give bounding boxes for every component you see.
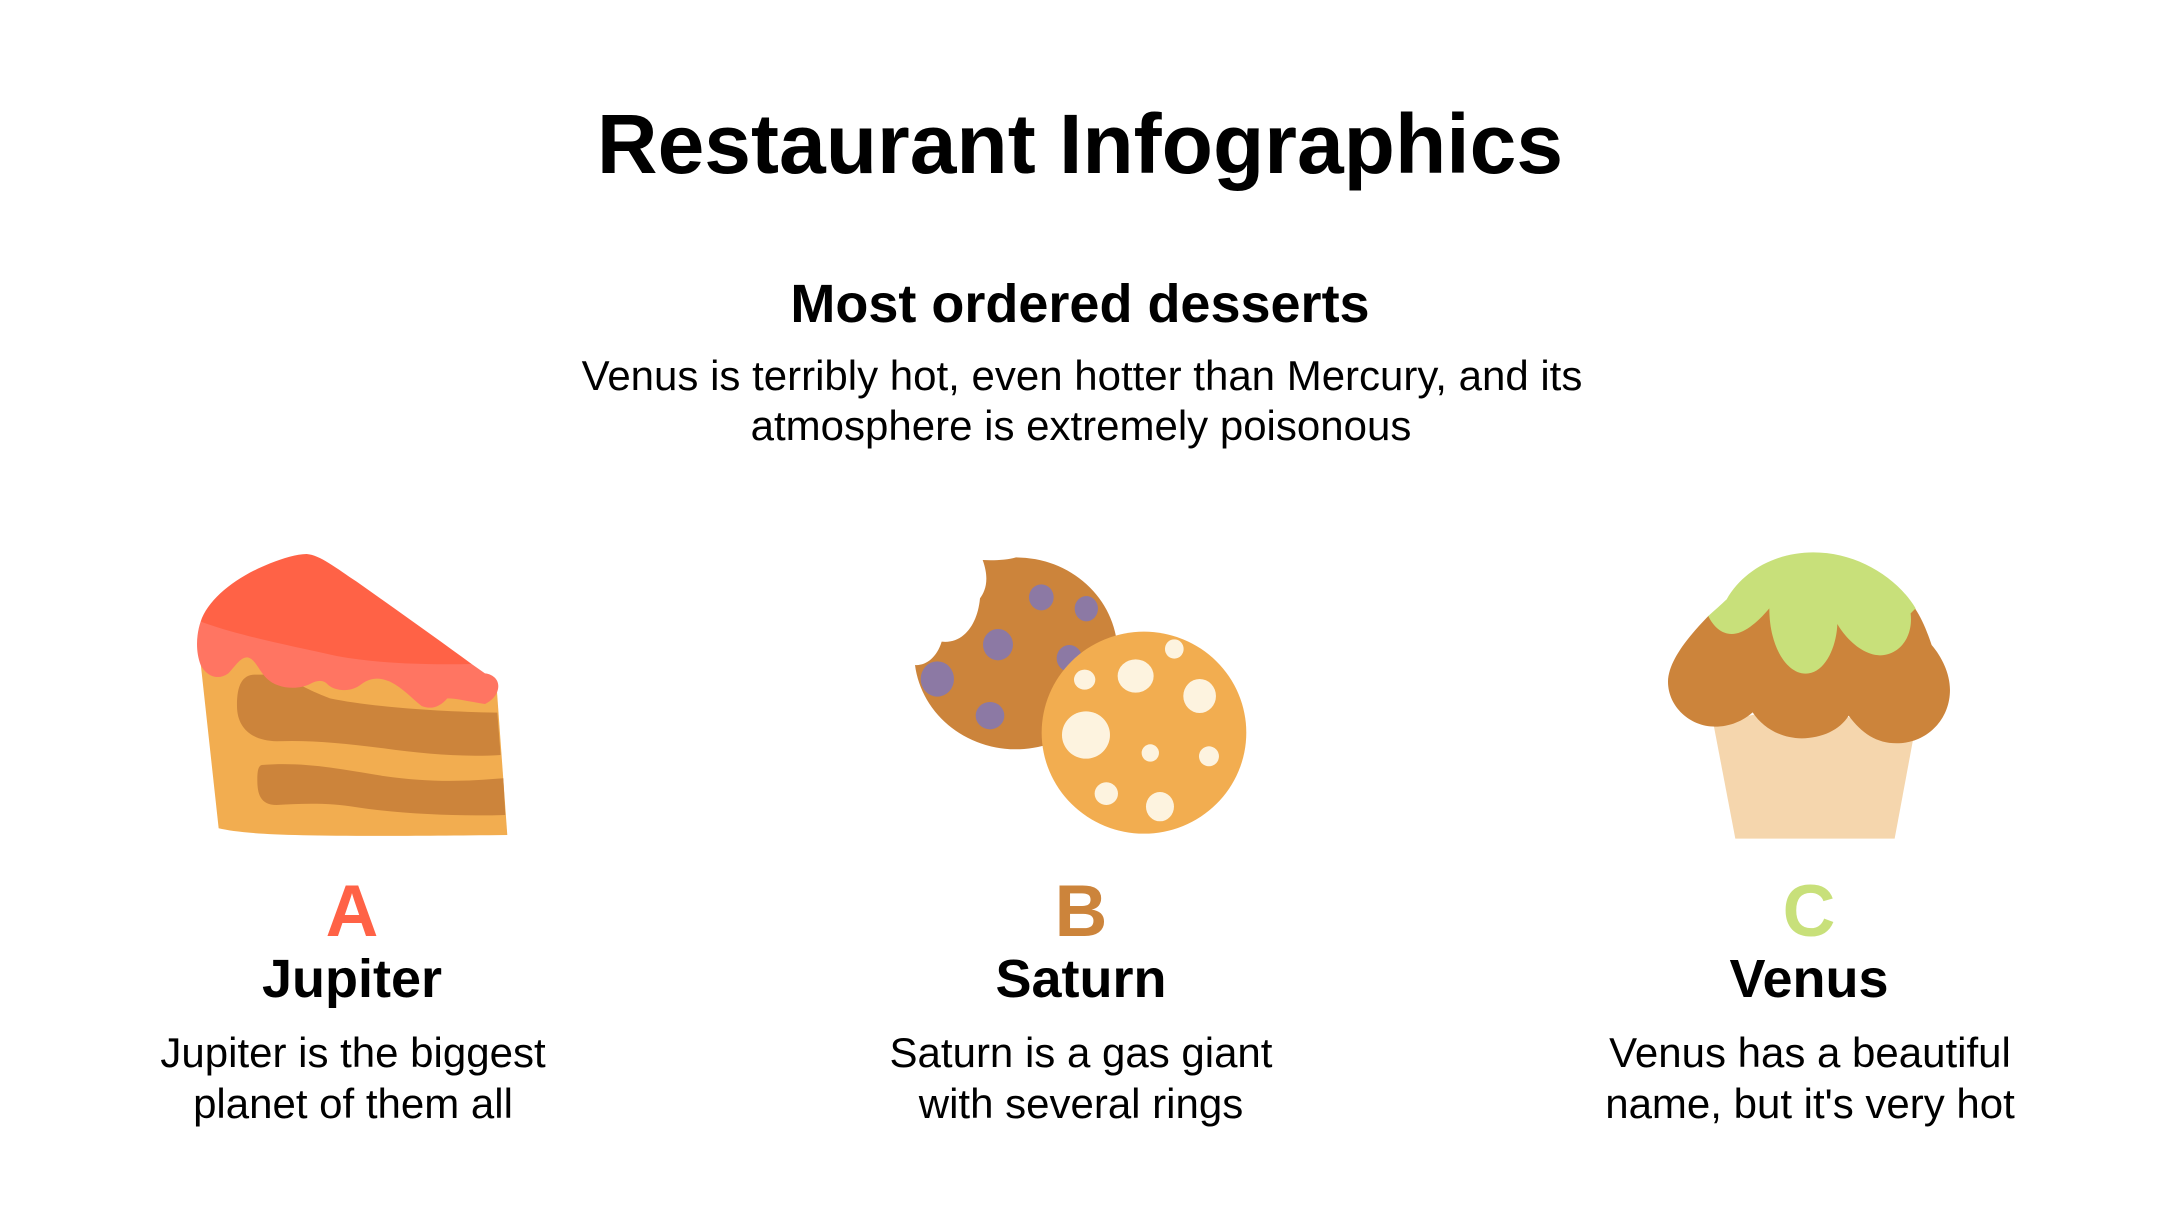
icon: cookies	[915, 557, 1246, 834]
description: Saturn: with several rings	[918, 1080, 1243, 1127]
description: Jupiter: Jupiter is the biggest	[160, 1029, 546, 1076]
letter C: C	[1783, 871, 1835, 952]
panel: option A	[160, 554, 546, 1127]
letter A: A	[326, 871, 378, 952]
icon: cake slice	[197, 554, 507, 836]
description: Venus	[1605, 1029, 2015, 1127]
panel: option B	[890, 557, 1273, 1127]
subtitle heading: Most ordered desserts	[790, 274, 1370, 334]
description: Saturn: Saturn is a gas giant	[890, 1029, 1273, 1076]
light chips	[1062, 639, 1219, 821]
intro text: Venus is terribly hot, even hotter than Mercury, and its	[582, 352, 1582, 399]
letter B: B	[1055, 871, 1107, 952]
chocolate chips	[921, 584, 1098, 729]
panel: option C	[1605, 552, 2015, 1127]
description: Jupiter: planet of them all	[193, 1080, 513, 1127]
description: Jupiter	[160, 1029, 546, 1127]
intro text: atmosphere is extremely poisonous	[751, 402, 1411, 449]
title: Restaurant Infographics	[597, 97, 1563, 191]
intro text	[582, 352, 1582, 449]
heading: Venus: Venus	[1729, 949, 1889, 1009]
heading: Jupiter: Jupiter	[262, 949, 442, 1009]
icon: cupcake	[1668, 552, 1950, 839]
description: Venus: name, but it's very hot	[1605, 1080, 2015, 1127]
description: Saturn	[890, 1029, 1273, 1127]
description: Venus: Venus has a beautiful	[1609, 1029, 2011, 1076]
heading: Saturn: Saturn	[995, 949, 1167, 1009]
